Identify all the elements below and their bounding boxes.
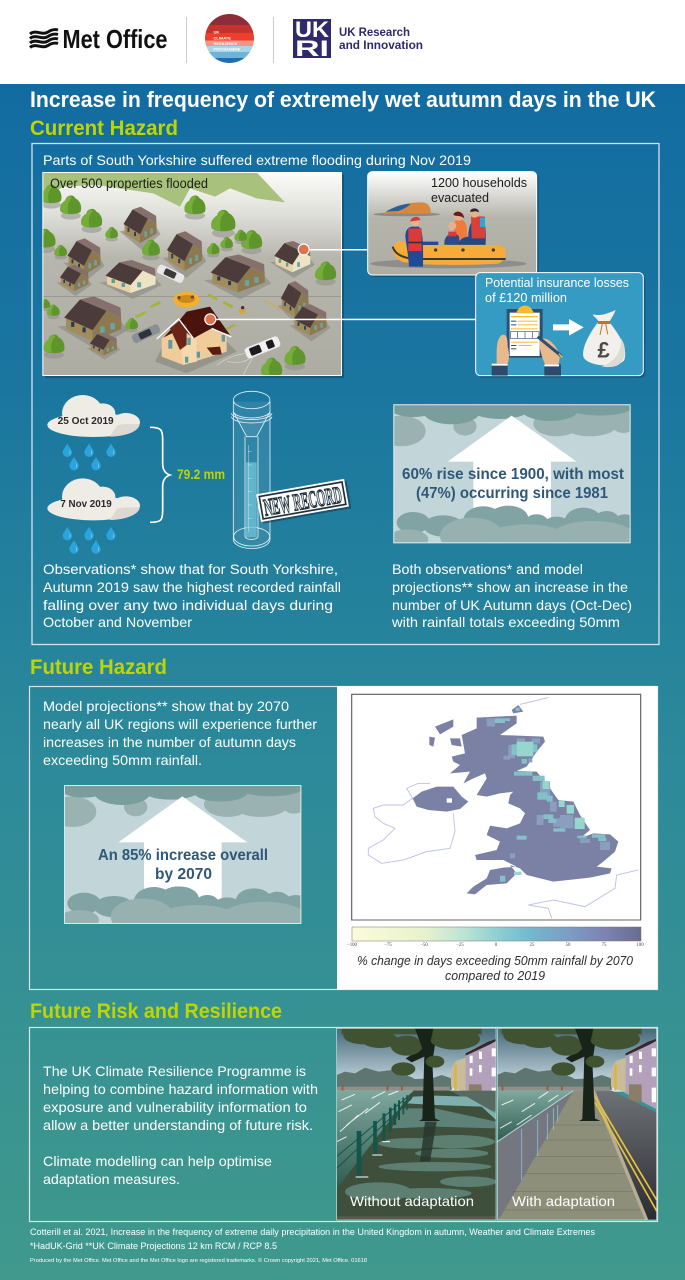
text: observations and model projections: with rainfall totals exceeding 50mm <box>391 614 620 630</box>
cloud: 7 Nov 2019: 7 Nov 2019 <box>60 499 112 510</box>
text: model projections: increases in the number of autumn days <box>43 734 296 750</box>
illustration: without adaptation <box>337 1027 497 1220</box>
label: 1200 households evacuated: evacuated <box>431 190 489 205</box>
map of percentage change <box>352 694 641 920</box>
footer references: *HadUK-Grid **UK Climate Projections 12 km RCM / RCP 8.5 <box>30 1241 277 1252</box>
high-change cells <box>487 718 610 858</box>
text: model projections: Model projections** show that by 2070 <box>43 698 289 714</box>
callout lines <box>205 244 476 325</box>
text: programme: helping to combine hazard information with <box>43 1081 318 1097</box>
stamp: NEW RECORD <box>262 482 344 522</box>
dinghy and people <box>370 208 527 268</box>
sunken car <box>373 202 440 216</box>
text: model projections <box>43 698 317 768</box>
brace <box>150 427 170 522</box>
rain gauge with new record stamp <box>231 391 351 548</box>
image labels: With adaptation <box>512 1193 615 1209</box>
UK Climate Resilience Programme logo: RESILIENCE <box>214 41 238 46</box>
image labels <box>350 1193 615 1209</box>
text: programme: adaptation measures. <box>43 1171 180 1187</box>
box: 60% rise: (47%) occurring since 1981 <box>416 485 608 502</box>
cloud: 7 Nov 2019 <box>47 478 140 554</box>
label: 1200 households evacuated <box>431 175 527 205</box>
card: insurance losses <box>476 273 645 378</box>
label: potential insurance losses <box>485 275 629 305</box>
icon: clipboard and hands <box>492 306 562 376</box>
image labels: Without adaptation <box>350 1193 474 1209</box>
map caption: % change in days exceeding 50mm rainfall by 2070 <box>357 954 633 968</box>
text: programme: exposure and vulnerability information to <box>43 1099 307 1115</box>
text: model projections: exceeding 50mm rainfall. <box>43 752 202 768</box>
UKRI logo <box>293 17 423 61</box>
title: Increase in frequency of extremely wet autumn days in the UK <box>30 87 656 112</box>
heading: future risk and resilience: Future Risk and Resilience <box>30 1000 282 1023</box>
text: observations: Autumn 2019 saw the highest recorded rainfall <box>43 579 341 595</box>
panel: future risk and resilience <box>30 1027 658 1222</box>
arrow <box>553 319 584 336</box>
UK Climate Resilience Programme logo: PROGRAMME <box>214 46 241 52</box>
rain clouds with dates <box>47 395 170 554</box>
panel: future hazard <box>30 686 658 990</box>
icon: money bag: £ <box>598 338 610 363</box>
panel: current hazard <box>32 144 659 644</box>
text: programme <box>43 1063 318 1187</box>
map caption <box>357 954 633 983</box>
islands <box>413 705 523 812</box>
box: 60% rise <box>378 397 638 554</box>
label: over 500 properties flooded: Over 500 properties flooded <box>50 176 208 191</box>
colour bar: −100 <box>347 943 358 948</box>
icon: money bag <box>583 310 625 367</box>
UK Climate Resilience Programme logo: CLIMATE <box>214 36 231 40</box>
colour bar: 100 <box>636 943 644 948</box>
cars and dinghy <box>131 264 281 359</box>
footer references: Produced by the Met Office. Met Office and the Met Office logo are registered trademarks. © Crown copyright 2021, Met Office. 01618 <box>30 1257 367 1264</box>
text: programme: Climate modelling can help optimise <box>43 1153 272 1169</box>
intro text: Parts of South Yorkshire suffered extreme flooding during Nov 2019 <box>43 152 471 168</box>
text: observations and model projections: projections** show an increase in the <box>392 579 628 595</box>
UKRI logo: UK Research <box>339 27 410 39</box>
colour bar: 25 <box>530 943 535 948</box>
colour bar: −50 <box>420 943 428 948</box>
box: 85% increase: by 2070 <box>155 866 212 883</box>
cloud: 25 Oct 2019 <box>47 395 140 470</box>
main flooded house <box>155 307 253 375</box>
UKRI logo: RI <box>295 36 329 61</box>
text: observations and model projections: Both observations* and model <box>392 561 583 577</box>
UK Climate Resilience Programme logo <box>205 14 254 63</box>
UKRI logo: UK <box>295 17 329 42</box>
colour bar <box>347 927 644 948</box>
panel: map and colour bar <box>337 686 658 990</box>
box: 85% increase: An 85% increase overall <box>98 847 268 864</box>
colour bar: 0 <box>495 943 498 948</box>
box: 85% increase <box>48 778 309 935</box>
text: observations: falling over any two individual days during <box>43 597 333 613</box>
Great Britain <box>450 716 618 894</box>
footer references: Cotterill et al. 2021, Increase in the frequency of extreme daily precipitation in the United Kingdom in autumn, Weather and Climate Extremes <box>30 1227 595 1238</box>
card: households evacuated <box>368 172 539 277</box>
Met Office logo: Met Office <box>62 24 168 54</box>
label: potential insurance losses: Potential insurance losses <box>485 275 629 290</box>
footer references <box>30 1227 595 1264</box>
flood illustration <box>35 172 344 382</box>
header logos <box>0 0 685 84</box>
label: potential insurance losses: of £120 million <box>485 290 567 305</box>
box: 60% rise: 60% rise since 1900, with most <box>402 466 624 483</box>
Ireland coastline <box>368 698 638 918</box>
Met Office logo <box>30 24 168 54</box>
colour bar: −75 <box>384 943 392 948</box>
text: observations: Observations* show that for South Yorkshire, <box>43 561 338 577</box>
text: observations and model projections: number of UK Autumn days (Oct-Dec) <box>392 597 632 613</box>
heading: future hazard: Future Hazard <box>30 656 167 679</box>
text: programme: allow a better understanding of future risk. <box>43 1117 313 1133</box>
text: programme: The UK Climate Resilience Programme is <box>43 1063 306 1079</box>
colour bar: 50 <box>566 943 571 948</box>
stamp <box>256 479 351 524</box>
map caption: compared to 2019 <box>445 969 545 983</box>
colour bar: −25 <box>456 943 464 948</box>
rainfall total: 79.2 mm <box>177 467 225 482</box>
text: observations and model projections <box>391 561 632 630</box>
text: observations: October and November <box>43 614 192 630</box>
colour bar: 75 <box>602 943 607 948</box>
text: observations <box>43 561 341 630</box>
label: 1200 households evacuated: 1200 households <box>431 175 527 190</box>
UK Climate Resilience Programme logo: UK <box>214 30 219 34</box>
cloud: 25 Oct 2019: 25 Oct 2019 <box>58 416 114 427</box>
UKRI logo: and Innovation <box>339 40 423 52</box>
illustration: with adaptation <box>497 1027 657 1220</box>
heading: current hazard: Current Hazard <box>30 117 178 140</box>
text: model projections: nearly all UK regions will experience further <box>43 716 317 732</box>
